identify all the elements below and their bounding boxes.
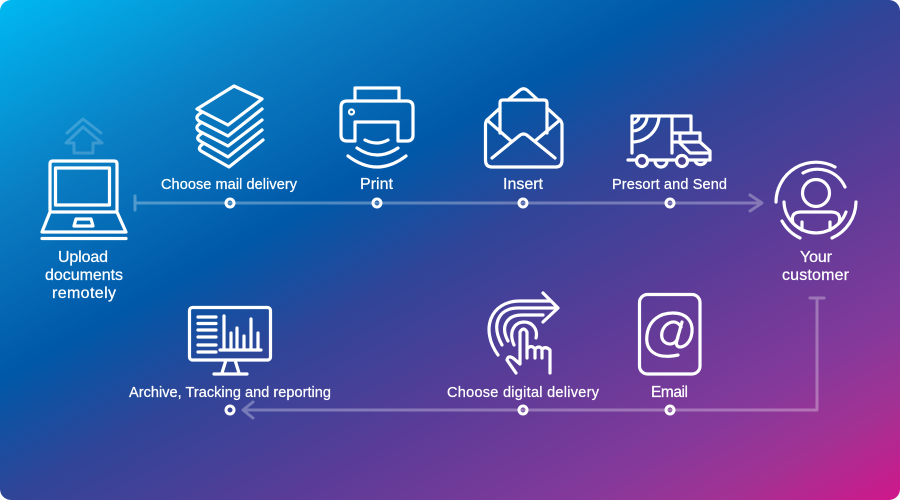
- label: choose mail delivery: Choose mail delivery: [161, 177, 298, 193]
- icon: delivery truck: [628, 116, 710, 167]
- label: choose digital delivery: Choose digital delivery: [447, 385, 600, 401]
- icon: laptop: [42, 161, 126, 238]
- label: your customer: Your: [800, 249, 833, 266]
- icon: customer: [776, 162, 856, 238]
- label: upload documents remotely: remotely: [52, 285, 116, 302]
- label: archive, tracking and reporting: Archive, Tracking and reporting: [129, 385, 331, 401]
- icon: printer: [341, 88, 413, 167]
- label: your customer: customer: [782, 267, 850, 284]
- label: upload documents remotely: [45, 249, 123, 302]
- icon: fingerprint touch: [489, 293, 558, 373]
- arrow: digital delivery line: [243, 298, 824, 418]
- timeline markers: digital delivery: [226, 406, 674, 414]
- arrow: mail delivery line: [135, 195, 762, 211]
- label: your customer: [782, 249, 850, 284]
- icon: upload arrow: [66, 119, 102, 153]
- icon: envelope: [486, 89, 562, 167]
- label: presort and send: Presort and Send: [612, 177, 727, 193]
- timeline markers: mail delivery: [226, 199, 674, 207]
- icon: reporting monitor: [190, 308, 270, 374]
- label: email: Email: [651, 384, 688, 401]
- label: print: Print: [360, 176, 394, 193]
- icon: email: [640, 294, 700, 374]
- label: insert: Insert: [503, 176, 544, 193]
- icon: paper stack: [197, 86, 263, 167]
- label: upload documents remotely: documents: [45, 267, 123, 284]
- label: upload documents remotely: Upload: [58, 249, 108, 266]
